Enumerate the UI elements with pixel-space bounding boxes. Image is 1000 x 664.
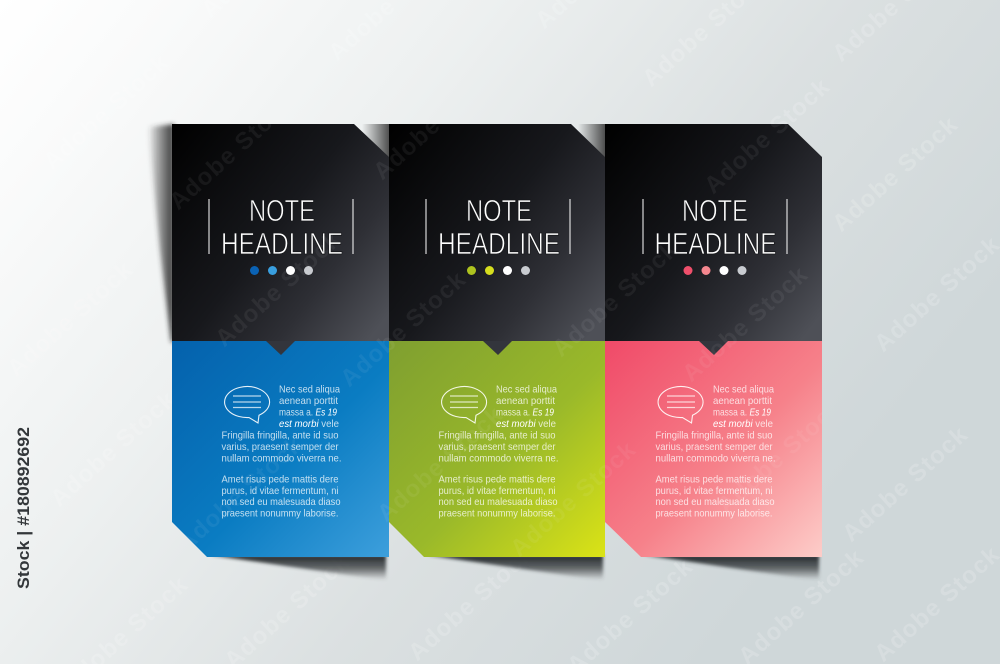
watermarks on background: Adobe Stock [45, 386, 181, 512]
panel: green note [389, 124, 605, 557]
headline frame [209, 199, 353, 254]
body text: aenean porttit [279, 395, 338, 407]
body text: Fringilla fringilla, ante id suo [222, 430, 339, 442]
body: blue block [172, 341, 389, 557]
headline [438, 193, 560, 261]
body text: praesent nonummy laborise. [438, 508, 556, 520]
shadows: bottom edges [210, 555, 819, 580]
body text: varius, praesent semper der [438, 441, 556, 453]
body text: praesent nonummy laborise. [222, 508, 338, 520]
watermarks on panels: Adobe Stock [210, 226, 346, 352]
watermarks on panels: Adobe Stock [699, 73, 835, 199]
pointer notch [483, 341, 512, 355]
headline [221, 193, 343, 261]
body text [438, 384, 558, 520]
dots [684, 266, 746, 275]
headline frame [643, 199, 787, 254]
header: dark block [172, 124, 389, 341]
watermarks on background: Adobe Stock [2, 256, 138, 382]
body text: est morbi vele [496, 418, 556, 430]
headline: NOTE [466, 193, 532, 228]
headline frame [426, 199, 570, 254]
body text: massa a. Es 19 [496, 406, 554, 418]
shadow: left edge of first panel [148, 124, 174, 342]
watermarks on panels: Adobe Stock [712, 393, 848, 519]
body text: purus, id vitae fermentum, ni [656, 485, 772, 497]
body text: purus, id vitae fermentum, ni [438, 485, 556, 497]
body text: non sed eu malesuada diaso [438, 496, 558, 508]
panel: coral note [605, 124, 822, 557]
header: dark block [389, 124, 605, 341]
headline: NOTE [249, 193, 315, 228]
dots [467, 266, 530, 275]
watermarks on background: Adobe Stock [837, 421, 973, 547]
icon: speech bubble [658, 387, 703, 423]
pointer notch [266, 341, 295, 355]
header: dark block [605, 124, 822, 341]
headline: HEADLINE [654, 226, 776, 261]
icon: speech bubble [442, 387, 487, 423]
body text: Nec sed aliqua [713, 384, 774, 396]
watermarks on background: Adobe Stock [38, 49, 174, 175]
headline [654, 193, 776, 261]
body text: Nec sed aliqua [279, 384, 340, 396]
watermarks on panels: Adobe Stock [172, 431, 308, 557]
body text: aenean porttit [496, 395, 555, 407]
body text: massa a. Es 19 [713, 406, 771, 418]
body text: nullam commodo viverra ne. [438, 452, 558, 464]
body text [656, 384, 776, 520]
body text: est morbi vele [279, 418, 339, 430]
stock id: Stock | #180892692 [14, 427, 33, 589]
headline: NOTE [682, 193, 748, 228]
pointer notch [699, 341, 728, 355]
body text: nullam commodo viverra ne. [222, 452, 342, 464]
body text: non sed eu malesuada diaso [222, 496, 341, 508]
headline: HEADLINE [438, 226, 560, 261]
watermarks on panels: Adobe Stock [368, 59, 504, 185]
body text: Fringilla fringilla, ante id suo [438, 430, 556, 442]
watermarks on panels: Adobe Stock [505, 436, 641, 562]
watermarks on panels: Adobe Stock [335, 266, 471, 392]
body: green block [389, 341, 605, 557]
watermarks on panels: Adobe Stock [677, 261, 813, 387]
watermarks on background: Adobe Stock [403, 540, 539, 664]
watermarks on panels [172, 124, 808, 557]
body text: massa a. Es 19 [279, 406, 337, 418]
icon: speech bubble [225, 387, 270, 423]
body text: Amet risus pede mattis dere [656, 474, 773, 486]
body text: aenean porttit [713, 395, 772, 407]
body text: Fringilla fringilla, ante id suo [656, 430, 773, 442]
body text: est morbi vele [713, 418, 773, 430]
body text: praesent nonummy laborise. [656, 508, 772, 520]
body text: varius, praesent semper der [222, 441, 339, 453]
headline: HEADLINE [221, 226, 343, 261]
watermarks on background: Adobe Stock [699, 73, 835, 199]
body text: Nec sed aliqua [496, 384, 557, 396]
body text [222, 384, 342, 520]
watermarks on panels: Adobe Stock [164, 89, 300, 215]
body text: Amet risus pede mattis dere [222, 474, 339, 486]
body text: Amet risus pede mattis dere [438, 474, 556, 486]
watermarks on panels: Adobe Stock [547, 236, 683, 362]
body: coral block [605, 341, 822, 557]
watermarks on background: Adobe Stock [827, 111, 963, 237]
body text: non sed eu malesuada diaso [656, 496, 775, 508]
dots [250, 266, 313, 275]
panel: blue note [172, 124, 389, 557]
watermarks on panels: Adobe Stock [372, 401, 508, 527]
body text: nullam commodo viverra ne. [656, 452, 776, 464]
body text: varius, praesent semper der [656, 441, 773, 453]
shadows: top-right folds [362, 124, 605, 160]
body text: purus, id vitae fermentum, ni [222, 485, 338, 497]
